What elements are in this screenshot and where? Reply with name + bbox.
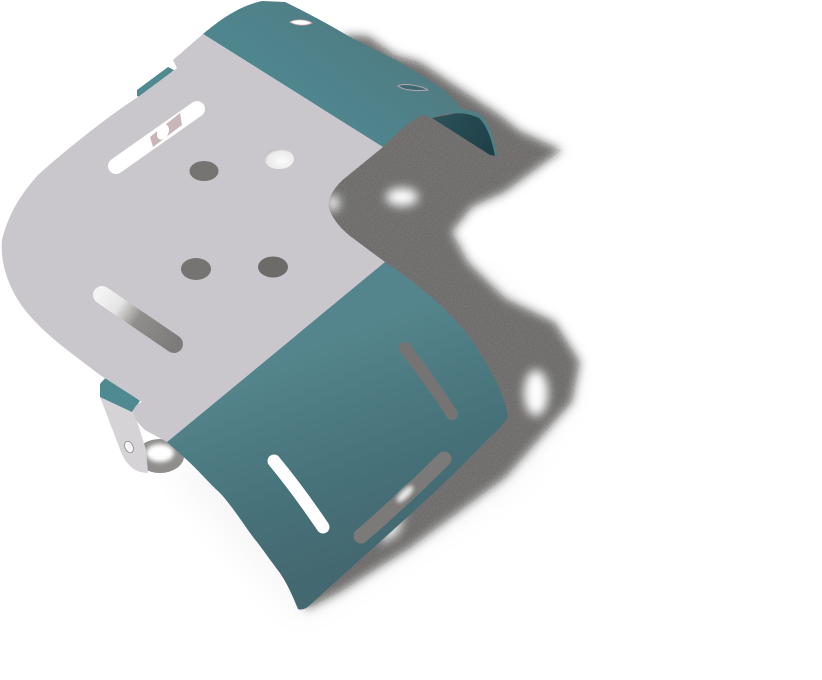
flange slot near top <box>290 20 312 25</box>
lower left bracket <box>100 375 184 473</box>
flange slot shadowed right <box>405 348 452 414</box>
lower teal flange <box>167 262 508 610</box>
strut visible through slot <box>150 113 182 147</box>
light spots in shadow <box>327 188 548 545</box>
upper teal flange <box>203 1 497 157</box>
bracket teal face <box>100 375 140 412</box>
bracket silver side <box>100 397 148 473</box>
hole dark lower right <box>258 256 288 278</box>
hole dark lower left <box>181 258 211 280</box>
hole light upper <box>264 149 294 169</box>
bracket ring shadow <box>136 439 184 473</box>
slot lower left <box>102 295 174 344</box>
flange slot white <box>274 461 323 527</box>
bracket opening <box>146 444 174 462</box>
flange slot shadowed bottom <box>361 459 444 536</box>
glint in slot <box>394 483 416 505</box>
strut hole <box>155 122 171 142</box>
soft ambient shadow <box>170 270 580 620</box>
bracket hole <box>123 440 135 454</box>
cast shadow <box>300 35 580 610</box>
slot upper left <box>116 109 197 166</box>
flange slot near rim <box>398 85 428 91</box>
grey main plate <box>2 34 385 442</box>
hole dark upper <box>190 161 218 181</box>
rear left tab <box>137 67 174 98</box>
inner curl of upper flange <box>432 112 496 156</box>
